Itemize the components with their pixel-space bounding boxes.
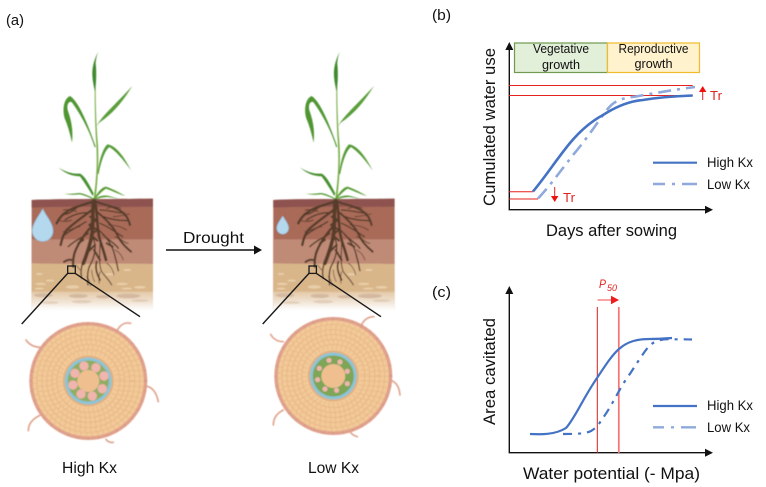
- legend: Low Kx: [707, 176, 750, 192]
- P50 shift arrow and label: P: [599, 277, 606, 291]
- Tr increase marker: [699, 86, 723, 103]
- Tr decrease marker: Tr: [563, 190, 576, 205]
- Tr increase marker: Tr: [710, 88, 723, 103]
- growth stage: vegetative: Vegetative: [533, 42, 589, 56]
- legend: Low Kx: [707, 419, 750, 435]
- Tr decrease marker: [551, 187, 576, 205]
- reference lines: [509, 86, 693, 199]
- growth stage: vegetative: [514, 42, 608, 72]
- panel label (a): (a): [6, 12, 24, 29]
- y axis title: Cumulated water use: [481, 48, 499, 206]
- growth stage: reproductive: growth: [634, 57, 673, 71]
- root cross-section, low Kx: [271, 317, 400, 437]
- icon: large water drop: [32, 209, 53, 241]
- axes: [505, 286, 713, 457]
- drought arrow with label: Drought: [183, 230, 245, 247]
- chart c: area cavitated: [481, 277, 753, 483]
- panel label (b): (b): [432, 7, 451, 24]
- panel label (c): (c): [432, 284, 451, 301]
- zoom box and lines, low Kx: [263, 266, 381, 324]
- illustration: low Kx plant and soil: [273, 52, 395, 310]
- legend: [653, 397, 753, 435]
- y axis title: Area cavitated: [481, 318, 499, 425]
- soil profile with roots, high Kx: [32, 199, 153, 310]
- curve: low Kx: [538, 87, 695, 198]
- soil profile with roots, low Kx: [273, 199, 395, 310]
- P50 markers: [597, 307, 619, 453]
- growth stage: reproductive: Reproductive: [618, 42, 689, 56]
- root cross-section, high Kx: [26, 322, 158, 442]
- icon: small water drop: [277, 216, 289, 234]
- P50 shift arrow and label: [598, 277, 619, 304]
- chart b: cumulated water use: [481, 42, 753, 240]
- x axis title: Water potential (- Mpa): [523, 465, 700, 483]
- wheat plant, high Kx: [58, 52, 132, 199]
- wheat plant, low Kx: [300, 52, 374, 199]
- x axis title: Days after sowing: [546, 222, 677, 240]
- curve: low Kx: [563, 339, 692, 434]
- curve: high Kx: [533, 96, 693, 192]
- growth stage: vegetative: growth: [542, 58, 580, 72]
- P50 shift arrow and label: 50: [607, 283, 618, 294]
- legend: High Kx: [707, 154, 753, 170]
- illustration: high Kx plant and soil: [32, 52, 153, 310]
- label: Low Kx: Low Kx: [308, 460, 359, 477]
- axes: [505, 42, 713, 214]
- growth stage: reproductive: [608, 42, 700, 72]
- zoom box and lines, high Kx: [22, 266, 140, 324]
- label: High Kx: High Kx: [62, 460, 117, 477]
- legend: [653, 154, 753, 192]
- legend: High Kx: [707, 397, 753, 413]
- drought arrow with label: [166, 230, 262, 254]
- curve: high Kx: [530, 338, 672, 434]
